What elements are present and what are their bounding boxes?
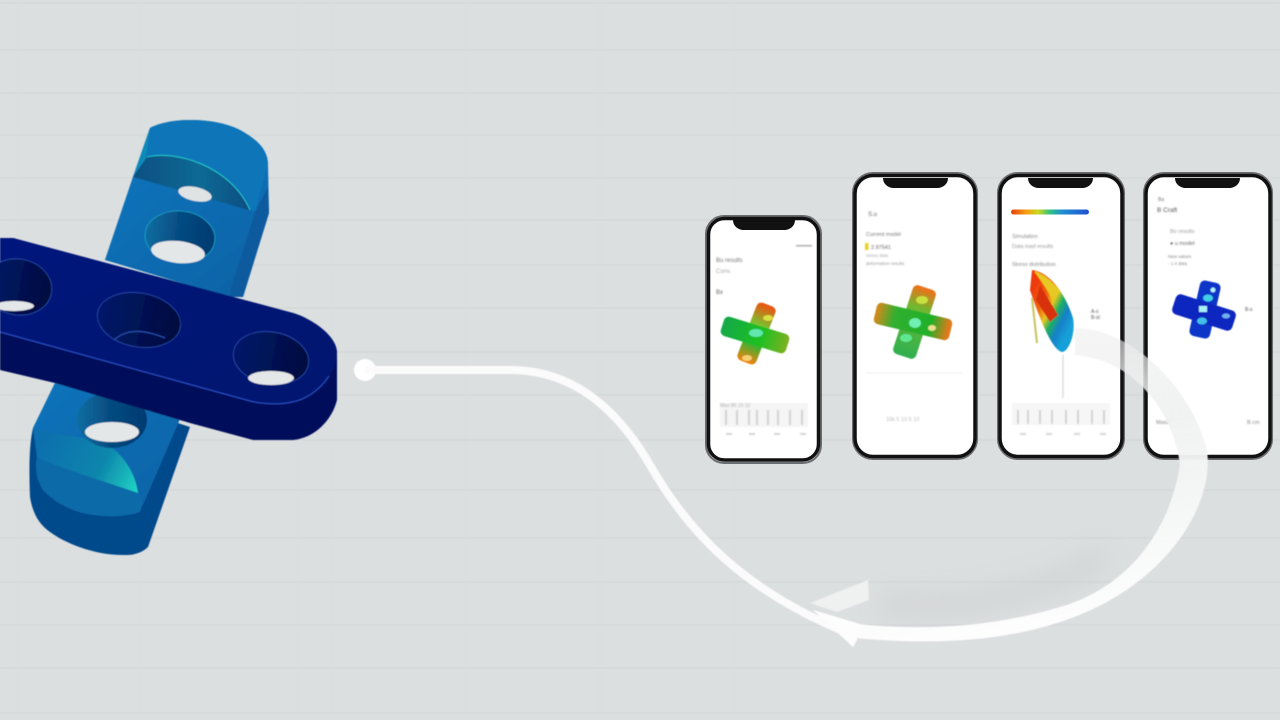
phone 2: green cross with orange ends: deformation results [866,261,905,266]
phone 4: blue cross [1144,173,1272,459]
phone 1: green and orange cross: Conv. [716,269,732,275]
phone 4: blue cross: Ba [1158,197,1164,203]
phone 2: green cross with orange ends: 2.97541 [871,245,891,251]
back arrowhead [810,580,869,612]
phone 3: rainbow leaf result: Simulation [1012,234,1038,240]
phone 4: blue cross: B-s [1245,307,1253,313]
vertical bracket, lower half [29,383,190,555]
phone 4: blue cross: New values [1168,254,1192,259]
phone 4: blue cross: - 1.4 data [1168,261,1188,266]
phone 1: green and orange cross: Max 80 10 10 [720,403,751,409]
phone 1: green and orange cross [706,216,821,463]
phone 4: blue cross: Mass [1156,420,1169,426]
colour scale bar [1011,210,1089,214]
curved line [365,370,845,632]
horizontal bracket [0,238,337,440]
phone 3: rainbow leaf result [998,173,1124,459]
phone 4: blue cross: B Craft [1157,207,1177,214]
vertical bracket, upper half [105,120,269,297]
phone 1: green and orange cross: Bu results [716,258,743,264]
phone 4: blue cross: Bo results [1170,229,1195,235]
phone 4: blue cross: B.cm [1247,420,1260,426]
arrow: connector from part curving to loop [354,328,1208,647]
phone 2: green cross with orange ends: 10k 5 10 5 10 [886,417,919,423]
phone 2: green cross with orange ends: stress data [866,253,889,258]
result cross [1177,286,1231,334]
phone 4: blue cross: ● u model [1170,241,1194,247]
3D part: crossed brackets [0,120,337,555]
rainbow leaf [1030,270,1074,352]
main arrowhead [813,610,860,647]
phone 2: green cross with orange ends: S.u [868,212,877,218]
start dot [354,359,376,381]
phone 3: rainbow leaf result: A-s [1091,309,1099,315]
phone 3: rainbow leaf result: B-st [1091,315,1100,321]
phone 3: rainbow leaf result: Stress distribution [1012,262,1056,268]
phone 2: green cross with orange ends [853,173,977,459]
loop band [855,328,1208,641]
result cross [726,308,784,361]
soft shadow inside loop [880,555,1105,606]
phone 1: green and orange cross: Bx [716,290,723,296]
result cross [879,290,947,354]
phone 3: rainbow leaf result: Data load results [1012,244,1054,250]
phone 2: green cross with orange ends: Current model [866,232,901,238]
